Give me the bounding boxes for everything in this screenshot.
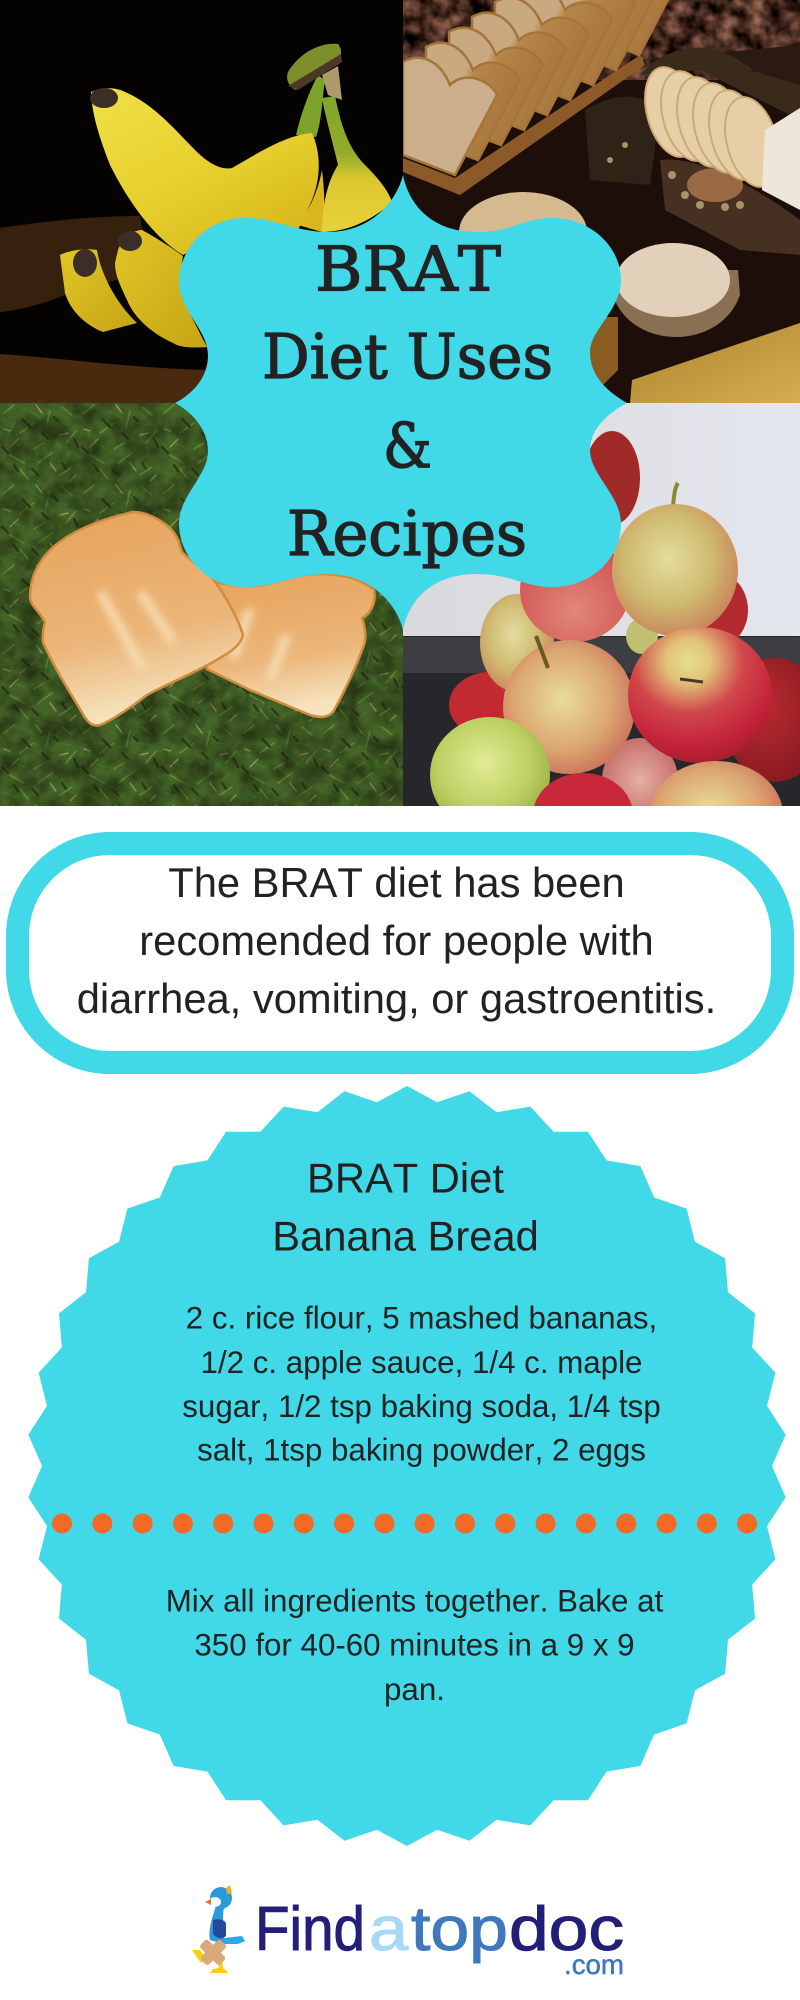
callout text: diarrhea, vomiting, or gastroentitis.	[77, 975, 716, 1022]
title text	[262, 232, 553, 570]
wordmark: a	[369, 1895, 409, 1964]
title text: Recipes	[287, 497, 527, 570]
wordmark: doc	[509, 1895, 624, 1964]
dotted divider	[52, 1514, 757, 1534]
callout text	[77, 859, 716, 1022]
ingredients: 2 c. rice flour, 5 mashed bananas,	[186, 1300, 657, 1336]
ingredients	[182, 1300, 661, 1468]
recipe heading: BRAT Diet	[307, 1154, 504, 1202]
wordmark	[255, 1895, 624, 1980]
panel: banana bread recipe	[28, 1086, 786, 1846]
photo: toast on grass	[0, 403, 403, 806]
ingredients: sugar, 1/2 tsp baking soda, 1/4 tsp	[182, 1389, 661, 1424]
instructions	[166, 1584, 664, 1707]
title text: Diet Uses	[262, 320, 553, 393]
instructions: pan.	[384, 1672, 445, 1707]
photo: bananas	[0, 0, 403, 403]
logo: Findatopdoc.com	[192, 1885, 624, 1980]
wordmark: Find	[255, 1895, 365, 1964]
photo: apples	[403, 403, 800, 806]
callout: who the diet is for	[18, 844, 782, 1062]
icon: duck mascot with bandage	[192, 1885, 245, 1973]
recipe heading: Banana Bread	[272, 1212, 539, 1260]
recipe heading	[272, 1154, 539, 1260]
instructions: Mix all ingredients together. Bake at	[166, 1584, 664, 1618]
title text: BRAT	[315, 232, 501, 306]
callout text: recomended for people with	[139, 917, 654, 964]
wordmark: .com	[564, 1949, 624, 1980]
callout text: The BRAT diet has been	[168, 859, 625, 906]
instructions: 350 for 40-60 minutes in a 9 x 9	[194, 1628, 635, 1662]
photo collage	[0, 0, 800, 869]
title plaque	[175, 175, 627, 630]
wordmark: top	[411, 1895, 508, 1964]
photo: bread and rice	[403, 0, 800, 403]
ingredients: 1/2 c. apple sauce, 1/4 c. maple	[201, 1345, 642, 1380]
ingredients: salt, 1tsp baking powder, 2 eggs	[197, 1432, 646, 1468]
title text: &	[383, 409, 432, 482]
